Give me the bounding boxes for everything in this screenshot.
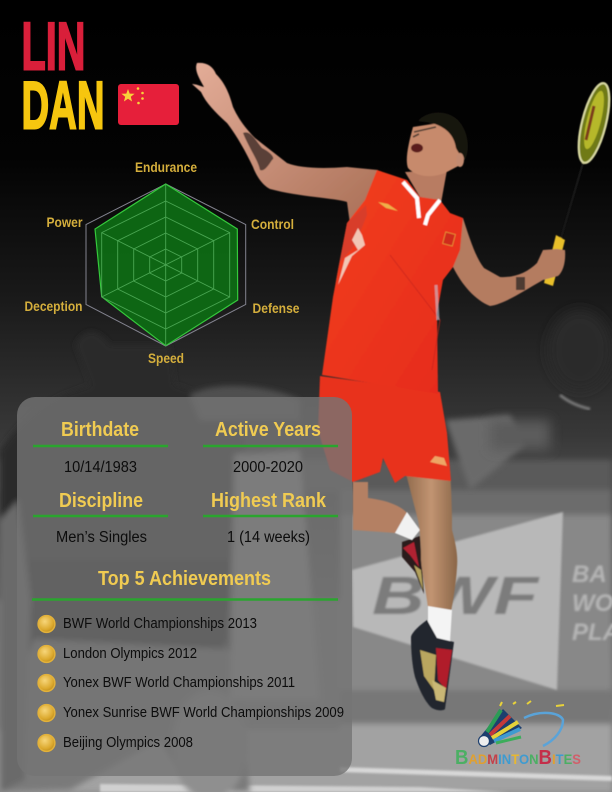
- racket-arm tattoo: [516, 277, 525, 290]
- radar grid: [102, 184, 230, 346]
- background: blurred player silhouettes: [0, 310, 612, 792]
- logo wordmark: BADMINTONBITES: [455, 747, 581, 769]
- radar data polygon: [95, 184, 238, 346]
- background: BWF banner: BA: [572, 561, 607, 588]
- panel: stat headings: Birthdate: [61, 418, 139, 441]
- neck: [405, 170, 447, 203]
- far leg: [353, 482, 424, 594]
- raised arm: [192, 63, 378, 224]
- racket arm: [453, 218, 565, 306]
- radar labels: Endurance: [135, 159, 197, 175]
- radar labels: Defense: [252, 300, 300, 316]
- panel: stat headings: Active Years: [215, 418, 321, 441]
- panel: stat values: 1 (14 weeks): [227, 529, 310, 546]
- radar labels: Deception: [24, 298, 82, 314]
- panel: stat headings: Top 5 Achievements: [98, 567, 271, 590]
- panel: stat values: 2000-2020: [233, 459, 303, 476]
- tattoo: [243, 132, 273, 170]
- title: DAN: DAN: [22, 68, 104, 144]
- background: BWF banner: [352, 512, 612, 690]
- title: LIN: LIN: [22, 8, 86, 84]
- panel: achievements list: London Olympics 2012: [63, 646, 197, 662]
- radar labels: [24, 159, 300, 366]
- panel: stat headings: Discipline: [59, 489, 143, 512]
- icon: China flag: [118, 84, 179, 125]
- radar labels: Power: [46, 214, 83, 230]
- sock: [428, 606, 452, 642]
- head: [407, 113, 468, 176]
- panel: green dividers: [32, 446, 338, 600]
- stats panel: [17, 397, 352, 776]
- background: court lines: [100, 767, 612, 792]
- background: BWF banner: BWF: [372, 566, 541, 626]
- logo: Badminton Bites: [455, 701, 581, 769]
- radar labels: Speed: [148, 350, 184, 366]
- shoe: [411, 620, 454, 710]
- panel: stat values: [56, 459, 310, 546]
- front leg: [405, 470, 457, 612]
- panel: achievements list: Yonex Sunrise BWF World Championships 2009: [63, 705, 344, 721]
- panel: stat values: Men’s Singles: [56, 529, 147, 546]
- panel: stat values: 10/14/1983: [64, 459, 137, 476]
- player: Lin Dan jumping: [192, 63, 612, 710]
- racket: [544, 80, 612, 286]
- radar chart: [24, 159, 300, 366]
- panel: achievements list: Yonex BWF World Championships 2011: [63, 675, 295, 691]
- radar labels: Control: [251, 216, 294, 232]
- panel: stat headings: Highest Rank: [211, 489, 327, 512]
- shorts: [318, 376, 451, 483]
- logo shuttlecock: [478, 701, 564, 746]
- radar outer frame: [86, 184, 246, 346]
- panel: achievements list: BWF World Championships 2013: [63, 616, 257, 632]
- panel: achievements list: [63, 616, 344, 751]
- panel: medal icons: [38, 616, 55, 751]
- panel: stat headings: [59, 418, 327, 590]
- jersey: [322, 170, 463, 394]
- panel: achievements list: Beijing Olympics 2008: [63, 735, 193, 751]
